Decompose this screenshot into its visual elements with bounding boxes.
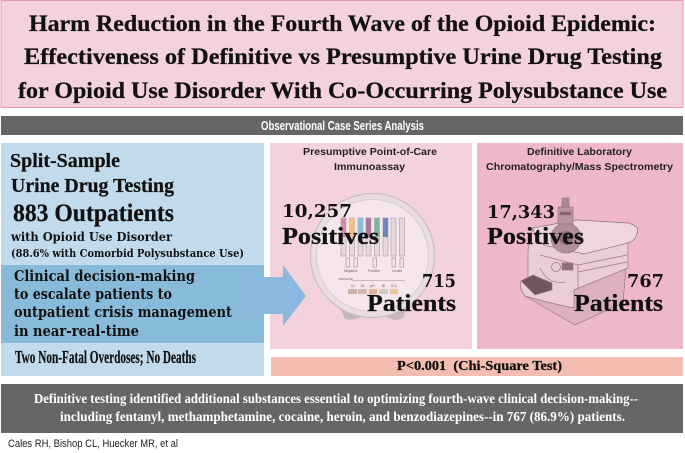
icon: mass spectrometer: [520, 198, 638, 325]
icon: urine test cup: Ni: [361, 284, 365, 288]
panel heading: Chromatography/Mass Spectrometry: [486, 161, 673, 173]
header bar: study design: [1, 116, 683, 135]
icon: urine test cup: Bl: [382, 284, 385, 288]
positives count: Positives: [487, 224, 584, 250]
p-value bar: P<0.001 (Chi-Square Test): [397, 358, 562, 373]
panel heading: Immunoassay: [334, 161, 405, 173]
heading: split-sample testing: Split-Sample: [10, 150, 120, 172]
band: clinical decision-making: [1, 265, 264, 343]
patients count: 715: [422, 271, 456, 292]
title banner: for Opioid Use Disorder With Co-Occurring Polysubstance Use: [18, 78, 667, 103]
panel: definitive laboratory mass spectrometry: [477, 143, 683, 349]
icon: urine test cup: S.G.: [391, 284, 398, 288]
band: clinical decision-making: in near-real-time: [14, 323, 139, 340]
band: clinical decision-making: to escalate patients to: [14, 286, 172, 303]
heading: split-sample testing: [10, 150, 174, 197]
conclusion banner: including fentanyl, methamphetamine, cocaine, heroin, and benzodiazepines--in 767 (86.9%) patients.: [60, 410, 625, 425]
icon: urine test cup: Positive: [368, 269, 380, 273]
panel: presumptive point-of-care immunoassay: [270, 143, 472, 349]
positives count: Positives: [282, 224, 379, 250]
population description: (88.6% with Comorbid Polysubstance Use): [11, 246, 244, 260]
patients count: Patients: [367, 291, 456, 317]
citation: Cales RH, Bishop CL, Huecker MR, et al: [8, 438, 178, 450]
patients count: [574, 271, 664, 317]
positives count: 10,257: [282, 201, 352, 222]
conclusion banner: Definitive testing identified additional substances essential to optimizing fourth-wave clinical decision-making--: [34, 392, 638, 407]
patient count: 883 Outpatients: [13, 200, 174, 227]
patients count: [367, 271, 456, 317]
population description: with Opioid Use Disorder: [10, 229, 172, 244]
patients count: Patients: [574, 291, 663, 317]
p-value bar: [271, 357, 683, 376]
title banner: Harm Reduction in the Fourth Wave of the Opioid Epidemic:: [29, 11, 656, 36]
panel: study population: [1, 143, 264, 376]
heading: split-sample testing: Urine Drug Testing: [11, 175, 174, 197]
panel heading: [486, 146, 673, 173]
icon: urine test cup: Invalid: [392, 269, 402, 273]
icon: urine test cup: Negative: [344, 269, 358, 273]
icon: urine test cup: Cr: [351, 284, 356, 288]
population description: [10, 229, 244, 260]
positives count: 17,343: [487, 202, 555, 223]
band: clinical decision-making: outpatient crisis management: [14, 304, 232, 321]
icon: urine test cup: [310, 194, 434, 320]
patients count: 767: [627, 271, 664, 292]
icon: urine test cup: ADD/DATE: [338, 277, 353, 281]
band: clinical decision-making: Clinical decision-making: [14, 268, 195, 285]
outcome note: Two Non-Fatal Overdoses; No Deaths: [15, 347, 196, 367]
positives count: [487, 202, 584, 250]
panel heading: [303, 146, 437, 173]
positives count: [282, 201, 379, 250]
icon: urine test cup: pH: [370, 284, 375, 288]
conclusion banner: [1, 384, 683, 433]
title banner: [1, 0, 683, 108]
title banner: Effectiveness of Definitive vs Presumptive Urine Drug Testing: [24, 44, 663, 69]
panel heading: Definitive Laboratory: [527, 146, 632, 158]
header bar: study design: Observational Case Series Analysis: [261, 118, 424, 133]
arrow: from patients to testing: [237, 265, 306, 326]
panel heading: Presumptive Point-of-Care: [303, 146, 437, 158]
